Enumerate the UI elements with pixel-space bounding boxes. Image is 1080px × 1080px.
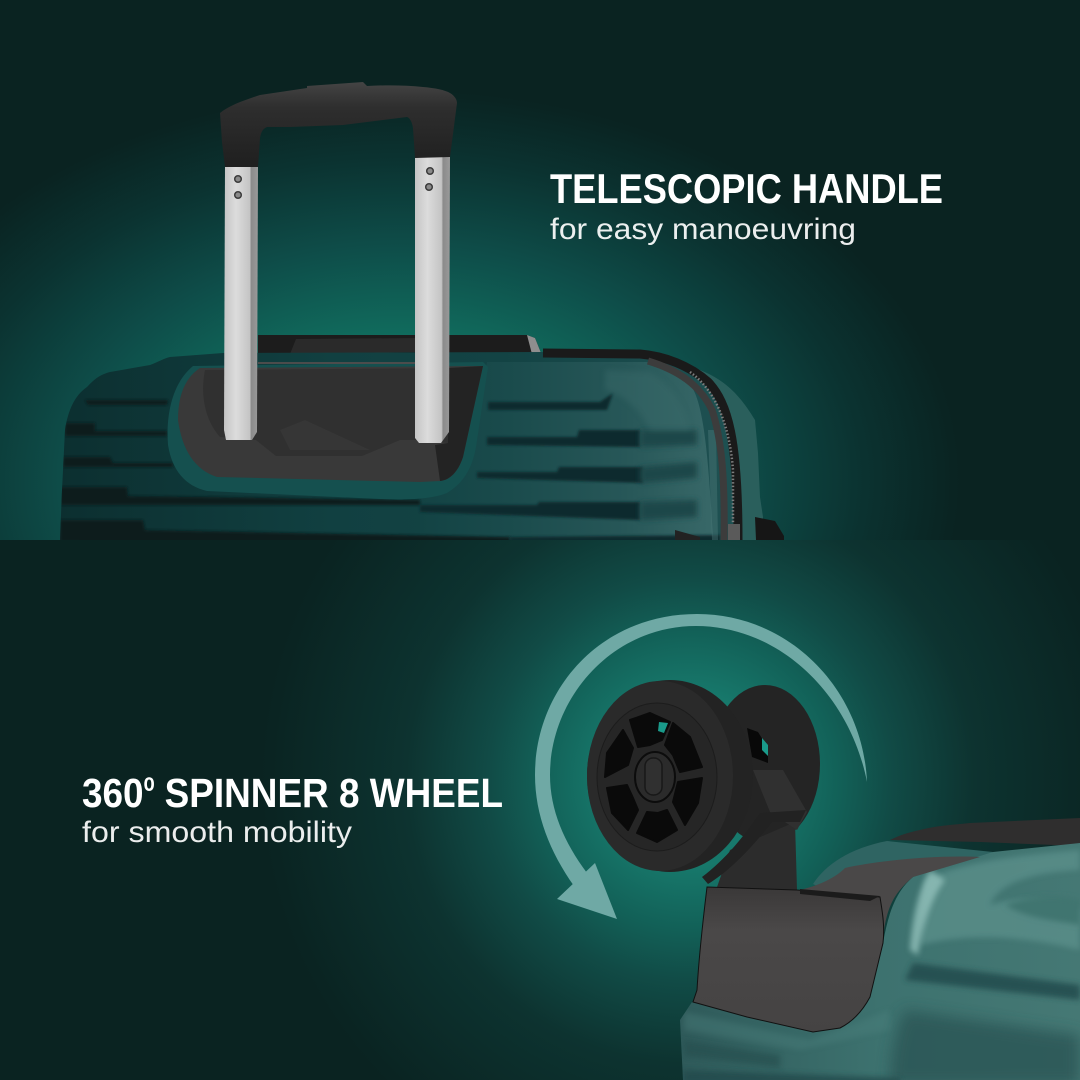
handle tray at top of suitcase (258, 335, 540, 353)
heading: telescopic handle: TELESCOPIC HANDLE (550, 165, 943, 212)
caster tray (800, 857, 980, 930)
suitcase body (60, 352, 784, 545)
lighter front panel (516, 362, 712, 536)
caster housing (693, 887, 884, 1032)
wheel spoke openings (605, 713, 702, 842)
arrow: rotation arc (535, 614, 867, 919)
suitcase lid dark strip (890, 818, 1080, 846)
zipper (543, 353, 738, 540)
recessed handle plate (168, 362, 488, 499)
heading: spinner wheel: SPINNER 8 WHEEL (154, 770, 503, 816)
panel: spinner wheel background (0, 540, 1080, 1080)
left aluminium pole (224, 165, 258, 440)
suitcase top with telescopic handle (60, 82, 784, 545)
side latches (755, 517, 784, 540)
caster fork (702, 770, 807, 890)
heading: spinner wheel: ⁰ (144, 774, 154, 807)
back wheel (710, 685, 820, 843)
wheel hub (635, 752, 675, 802)
shell highlights and ribs (920, 850, 1080, 950)
front wheel (587, 680, 753, 872)
subheading: smooth mobility: for smooth mobility (82, 816, 352, 849)
panel: telescopic handle background (0, 0, 1080, 540)
right ribs (420, 393, 720, 545)
pole rivets (235, 168, 433, 198)
handle grip (220, 82, 457, 167)
subheading: easy manoeuvring: for easy manoeuvring (550, 213, 856, 246)
teal ridge behind housing (813, 841, 993, 890)
heading: spinner wheel: 360 (82, 770, 150, 816)
suitcase bottom corner (587, 680, 1080, 1080)
right aluminium pole (415, 155, 450, 443)
suitcase shell (680, 843, 1080, 1080)
left ribs (60, 400, 510, 545)
rear shell beyond zipper (700, 370, 763, 540)
